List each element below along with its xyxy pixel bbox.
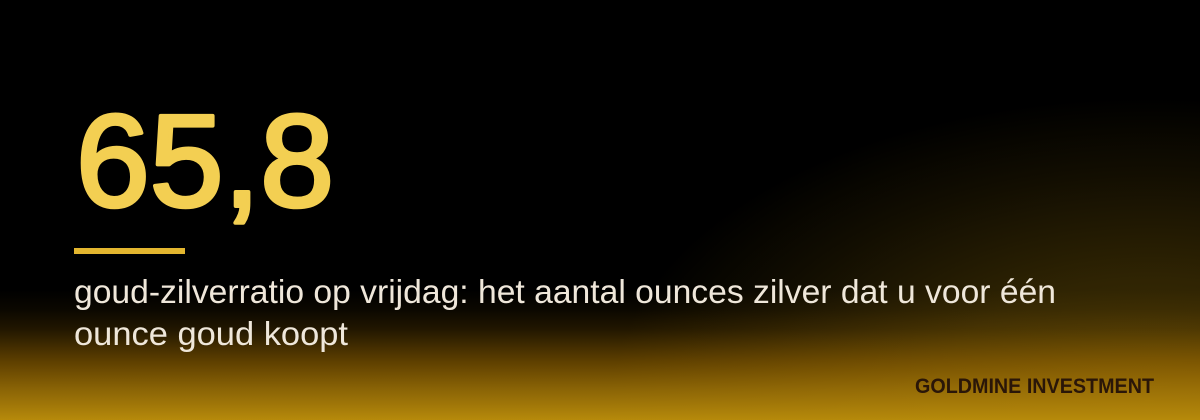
brand label: GOLDMINE INVESTMENT [915, 375, 1154, 398]
headline number: 65,8 [76, 87, 334, 234]
description text: ounce goud koopt [74, 315, 348, 352]
accent rule [74, 248, 185, 254]
description text [74, 273, 1056, 352]
description text: goud-zilverratio op vrijdag: het aantal ounces zilver dat u voor één [74, 273, 1056, 310]
